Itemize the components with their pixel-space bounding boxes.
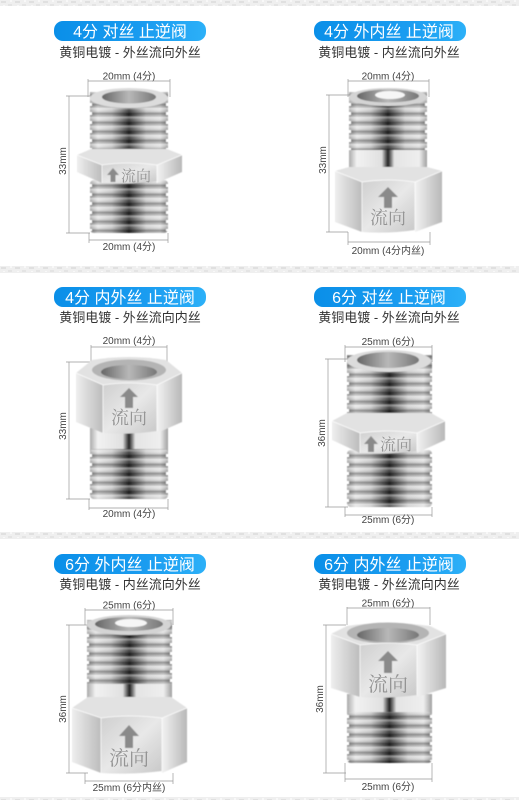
flow label: 流向 xyxy=(109,742,149,771)
flow label: 流向 xyxy=(370,204,406,230)
height dimension: 33mm xyxy=(58,147,69,175)
panel: 4分 内外丝 xyxy=(54,287,206,520)
panel: 6分 外内丝 xyxy=(54,554,206,794)
subtitle: 黄铜电镀 - 外丝流向外丝 xyxy=(59,45,201,60)
bottom dimension xyxy=(89,499,168,520)
bottom dimension xyxy=(89,233,168,253)
top dimension xyxy=(85,600,173,625)
subtitle: 黄铜电镀 - 外丝流向内丝 xyxy=(59,310,201,325)
title pill xyxy=(314,287,466,307)
fitting: female hex top, male bottom xyxy=(331,622,446,763)
top dimension: 25mm (6分) xyxy=(362,336,414,348)
top dimension: 20mm (4分) xyxy=(103,335,155,347)
panel: 6分 对丝 xyxy=(314,287,466,526)
height dimension: 36mm xyxy=(317,419,328,447)
panel: 4分 对丝 xyxy=(54,21,206,253)
title pill: 6分 对丝 止逆阀 xyxy=(332,289,446,307)
flow label: 流向 xyxy=(380,432,412,455)
top dimension: 25mm (6分) xyxy=(362,598,414,610)
top dimension xyxy=(347,598,430,625)
top dimension xyxy=(345,336,432,362)
bottom dimension: 20mm (4分) xyxy=(103,241,155,253)
top dimension xyxy=(348,70,429,97)
top dimension xyxy=(91,335,167,362)
bottom dimension xyxy=(345,507,432,526)
title pill: 6分 外内丝 止逆阀 xyxy=(65,556,195,574)
top dimension: 20mm (4分) xyxy=(103,70,155,82)
height dimension xyxy=(58,625,88,773)
top dimension: 25mm (6分) xyxy=(103,600,155,612)
subtitle: 黄铜电镀 - 内丝流向外丝 xyxy=(59,577,201,592)
bottom dimension xyxy=(348,232,430,257)
height dimension: 33mm xyxy=(58,412,69,440)
title pill: 4分 外内丝 止逆阀 xyxy=(324,23,454,41)
flow label: 流向 xyxy=(111,404,147,430)
top dimension xyxy=(88,70,170,97)
panel: 6分 内外丝 xyxy=(314,554,466,793)
height dimension xyxy=(318,95,350,232)
height dimension xyxy=(58,96,90,233)
height dimension xyxy=(317,359,350,507)
title pill: 6分 内外丝 止逆阀 xyxy=(324,556,454,574)
bottom dimension: 25mm (6分) xyxy=(362,514,414,526)
height dimension: 36mm xyxy=(315,685,326,713)
fitting: male top, female hex bottom xyxy=(335,88,442,233)
fitting: double male xyxy=(77,88,182,233)
fitting: double male xyxy=(332,350,445,507)
subtitle: 黄铜电镀 - 外丝流向外丝 xyxy=(318,310,460,325)
bottom dimension: 25mm (6分) xyxy=(362,781,414,793)
bottom dimension xyxy=(85,773,173,794)
subtitle: 黄铜电镀 - 内丝流向外丝 xyxy=(318,45,460,60)
height dimension: 36mm xyxy=(58,695,69,723)
top dimension: 20mm (4分) xyxy=(362,70,414,82)
flow label: 流向 xyxy=(121,165,151,186)
bottom dimension: 20mm (4分内丝) xyxy=(352,244,424,257)
flow label: 流向 xyxy=(368,668,408,697)
height dimension: 33mm xyxy=(318,146,329,174)
fitting: male top, female hex bottom xyxy=(72,615,187,774)
height dimension xyxy=(315,625,346,773)
height dimension xyxy=(58,362,90,499)
bottom dimension: 25mm (6分内丝) xyxy=(93,781,165,794)
title pill: 4分 内外丝 止逆阀 xyxy=(65,289,195,307)
fitting: female hex top, male bottom xyxy=(76,357,182,499)
bottom dimension: 20mm (4分) xyxy=(103,508,155,520)
title pill xyxy=(54,21,206,41)
bottom dimension xyxy=(345,763,432,793)
subtitle: 黄铜电镀 - 外丝流向内丝 xyxy=(318,577,460,592)
panel: 4分 外内丝 xyxy=(314,21,466,257)
title pill: 4分 对丝 止逆阀 xyxy=(73,23,187,41)
